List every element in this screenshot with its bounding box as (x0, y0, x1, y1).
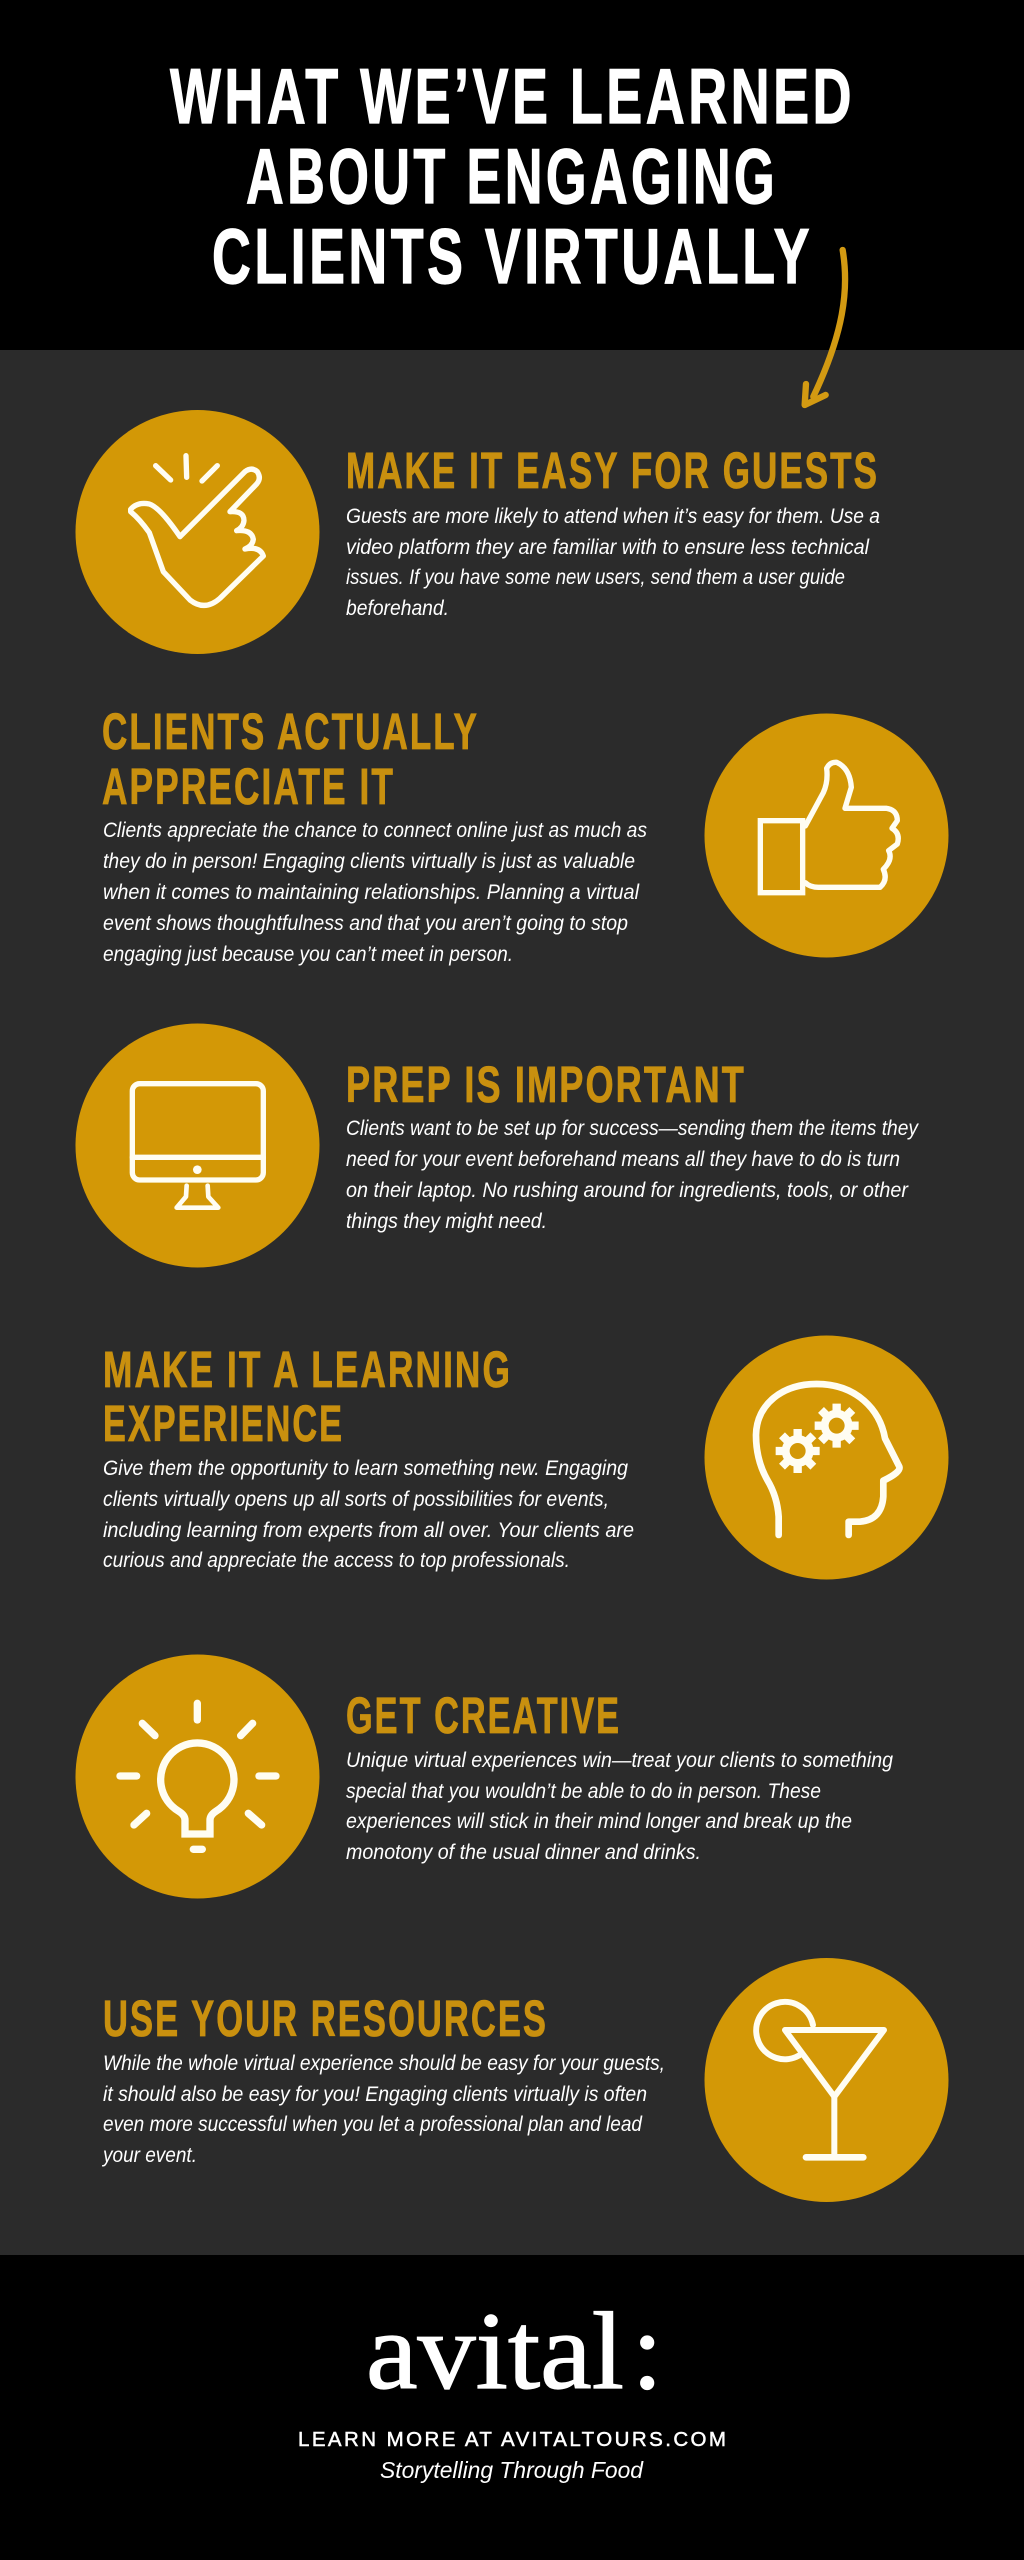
heading: APPRECIATE IT (102, 758, 395, 815)
title: ABOUT ENGAGING (246, 132, 778, 220)
body text: engaging just because you can’t meet in person. (103, 942, 513, 966)
body text: monotony of the usual dinner and drinks. (346, 1840, 701, 1864)
icon: desktop monitor (76, 1024, 320, 1268)
tagline: Storytelling Through Food (380, 2457, 644, 2483)
body text (346, 504, 880, 620)
body text: While the whole virtual experience should be easy for your guests, (103, 2051, 665, 2075)
body text: on their laptop. No rushing around for ingredients, tools, or other (346, 1178, 909, 1202)
panel: make it a learning experience (103, 1336, 948, 1580)
panel: prep is important (76, 1024, 919, 1268)
body text (346, 1748, 893, 1864)
body text: video platform they are familiar with to ensure less technical (346, 535, 870, 559)
heading: PREP IS IMPORTANT (346, 1056, 746, 1113)
body text (346, 1116, 919, 1233)
body text: things they might need. (346, 1209, 547, 1233)
body text: including learning from experts from all over. Your clients are (103, 1518, 634, 1542)
heading: GET CREATIVE (346, 1687, 621, 1744)
title (170, 52, 855, 300)
body text: Clients want to be set up for success—sending them the items they (346, 1116, 919, 1140)
panel: clients actually appreciate it (102, 703, 948, 966)
logo: avital: avital (366, 2290, 624, 2412)
body text: when it comes to maintaining relationships. Planning a virtual (103, 880, 640, 904)
heading: MAKE IT A LEARNING (103, 1341, 512, 1398)
panel: make it easy for guests (76, 410, 880, 654)
body text: Clients appreciate the chance to connect online just as much as (103, 818, 647, 842)
body text: your event. (101, 2143, 197, 2167)
heading: CLIENTS ACTUALLY (102, 703, 479, 760)
body text: they do in person! Engaging clients virtually is just as valuable (103, 849, 635, 873)
body text: Unique virtual experiences win—treat your clients to something (346, 1748, 893, 1772)
logo: avital: : (632, 2290, 663, 2412)
body text: event shows thoughtfulness and that you aren’t going to stop (103, 911, 628, 935)
call to action: LEARN MORE AT AVITALTOURS.COM (298, 2428, 726, 2451)
body text (101, 2051, 665, 2167)
body text: curious and appreciate the access to top professionals. (103, 1548, 570, 1572)
heading: USE YOUR RESOURCES (103, 1990, 548, 2047)
body text (103, 1456, 634, 1572)
arrow (805, 250, 845, 405)
body text: even more successful when you let a professional plan and lead (103, 2112, 643, 2136)
body text: beforehand. (346, 596, 449, 620)
panel: use your resources (101, 1958, 948, 2202)
footer panel (0, 2255, 1024, 2560)
body text: experiences will stick in their mind longer and break up the (346, 1809, 852, 1833)
icon: head with gears (704, 1336, 948, 1580)
icon: cocktail glass (704, 1958, 948, 2202)
body text: issues. If you have some new users, send them a user guide (346, 565, 845, 589)
body text (103, 818, 647, 966)
icon: thumbs up (704, 714, 948, 958)
panel: get creative (76, 1654, 893, 1898)
icon: light bulb (76, 1654, 320, 1898)
heading (103, 1341, 512, 1452)
heading (102, 703, 479, 815)
body text: clients virtually opens up all sorts of possibilities for events, (103, 1487, 609, 1511)
body text: need for your event beforehand means all they have to do is turn (346, 1147, 900, 1171)
icon: snapping fingers (76, 410, 320, 654)
header panel (0, 0, 1024, 350)
body text: it should also be easy for you! Engaging clients virtually is often (103, 2082, 647, 2106)
heading: EXPERIENCE (103, 1395, 344, 1452)
body text: Guests are more likely to attend when it’s easy for them. Use a (346, 504, 880, 528)
body text: special that you wouldn’t be able to do in person. These (346, 1779, 821, 1803)
body text: Give them the opportunity to learn something new. Engaging (103, 1456, 628, 1480)
